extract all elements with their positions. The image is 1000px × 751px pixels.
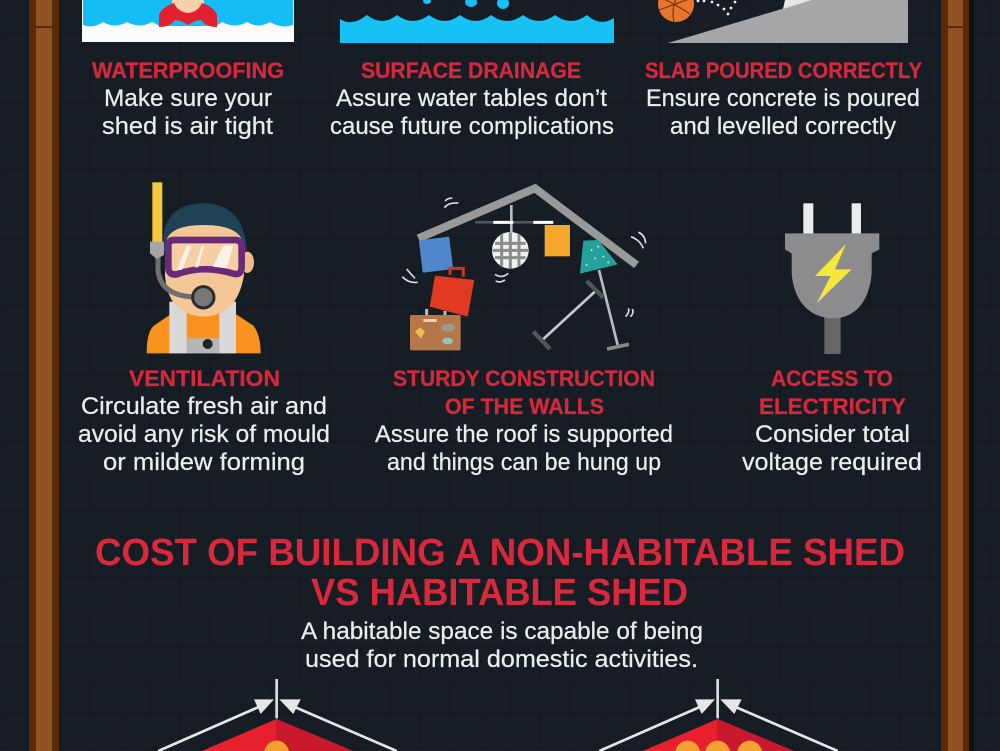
feature: sturdy construction of the walls: and things can be hung up — [387, 449, 661, 476]
feature: sturdy construction of the walls: STURDY CONSTRUCTION — [393, 366, 655, 391]
right wooden post — [941, 0, 974, 751]
section heading — [95, 532, 905, 614]
feature: access to electricity — [742, 366, 922, 476]
feature: sturdy construction of the walls: OF THE WALLS — [445, 394, 604, 419]
feature: access to electricity: ELECTRICITY — [759, 394, 906, 419]
feature: waterproofing: Make sure your — [104, 85, 272, 112]
feature: surface drainage: cause future complications — [330, 113, 614, 140]
icon: swimmer in water — [82, 0, 294, 42]
section intro text: used for normal domestic activities. — [305, 646, 698, 673]
feature: ventilation: or mildew forming — [103, 449, 305, 476]
section intro text: A habitable space is capable of being — [301, 618, 703, 645]
section heading: VS HABITABLE SHED — [311, 572, 688, 614]
feature: ventilation — [78, 366, 330, 476]
feature: access to electricity: Consider total — [755, 421, 910, 448]
icon: shaking roof with hanging items — [402, 188, 646, 350]
feature: ventilation: VENTILATION — [129, 366, 280, 391]
feature: surface drainage: Assure water tables don’t — [336, 85, 607, 112]
icon: electric plug — [785, 203, 879, 354]
feature: slab poured correctly: Ensure concrete is poured — [646, 85, 920, 112]
icon: diver with snorkel — [147, 182, 261, 353]
feature: waterproofing — [92, 58, 284, 140]
left wooden post — [29, 0, 59, 751]
feature: waterproofing: shed is air tight — [102, 113, 273, 140]
section intro text — [301, 618, 703, 673]
feature: access to electricity: ACCESS TO — [771, 366, 893, 391]
icon: water surface with drips — [340, 0, 614, 43]
feature: waterproofing: WATERPROOFING — [92, 58, 284, 83]
section heading: COST OF BUILDING A NON-HABITABLE SHED — [95, 532, 905, 574]
icon: habitable shed roof — [599, 679, 838, 751]
feature: ventilation: avoid any risk of mould — [78, 421, 330, 448]
feature: ventilation: Circulate fresh air and — [81, 393, 327, 420]
feature: slab poured correctly: SLAB POURED CORRECTLY — [645, 58, 922, 83]
feature: sturdy construction of the walls — [375, 366, 673, 476]
icon: sloped slab with basketball — [658, 0, 908, 43]
feature: slab poured correctly — [645, 58, 922, 140]
icon: non-habitable shed roof — [158, 679, 397, 751]
feature: slab poured correctly: and levelled correctly — [670, 113, 896, 140]
feature: surface drainage — [330, 58, 614, 140]
feature: sturdy construction of the walls: Assure the roof is supported — [375, 421, 673, 448]
feature: surface drainage: SURFACE DRAINAGE — [361, 58, 581, 83]
feature: access to electricity: voltage required — [742, 449, 922, 476]
